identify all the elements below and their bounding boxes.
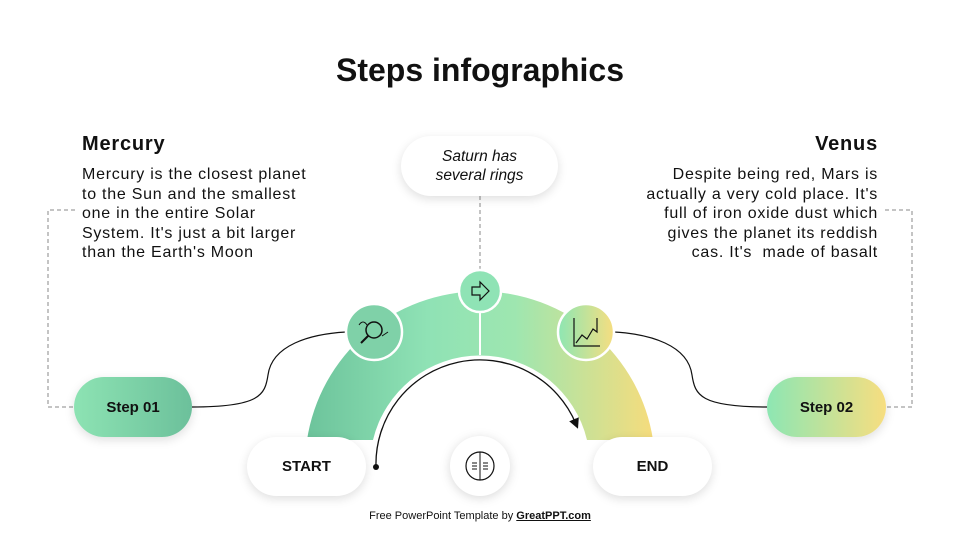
- text block: venus: Despite being red, Mars is: [673, 166, 878, 183]
- pill: step 02: [767, 377, 886, 437]
- text block: mercury: to the Sun and the smallest: [82, 186, 296, 202]
- icon: center: [450, 436, 510, 496]
- icon: arrow: [459, 270, 501, 312]
- arc band: [307, 291, 653, 440]
- footer: Free PowerPoint Template by GreatPPT.com: [369, 510, 591, 522]
- icon: search: [346, 304, 402, 360]
- curve connectors: [192, 332, 768, 407]
- pill: end: [593, 437, 712, 496]
- text block: venus: Venus: [815, 133, 878, 155]
- text block: mercury: Mercury: [82, 133, 165, 155]
- callout: saturn: [401, 136, 558, 196]
- title: Steps infographics: [336, 52, 624, 88]
- text block: mercury: one in the entire Solar: [82, 205, 256, 222]
- text block: mercury: System. It's just a bit larger: [82, 224, 296, 242]
- text block: mercury: [82, 133, 306, 261]
- pill: step 01: Step 01: [106, 398, 160, 416]
- pill: start: START: [282, 458, 331, 475]
- pill: end: END: [637, 458, 668, 475]
- icon: chart: [558, 304, 614, 360]
- pill: start: [247, 437, 366, 496]
- text block: venus: gives the planet its reddish: [668, 224, 878, 242]
- callout: saturn: several rings: [436, 167, 523, 184]
- text block: venus: [646, 133, 878, 261]
- arrow arc: [376, 360, 576, 467]
- text block: mercury: than the Earth's Moon: [82, 244, 254, 261]
- text block: venus: actually a very cold place. It's: [646, 186, 878, 202]
- text block: venus: full of iron oxide dust which: [664, 205, 878, 222]
- text block: venus: cas. It's made of basalt: [692, 244, 878, 261]
- callout: saturn: Saturn has: [442, 148, 517, 165]
- text block: mercury: Mercury is the closest planet: [82, 166, 306, 183]
- dashed connectors: [48, 196, 912, 407]
- pill: step 02: Step 02: [800, 398, 853, 416]
- pill: step 01: [74, 377, 192, 437]
